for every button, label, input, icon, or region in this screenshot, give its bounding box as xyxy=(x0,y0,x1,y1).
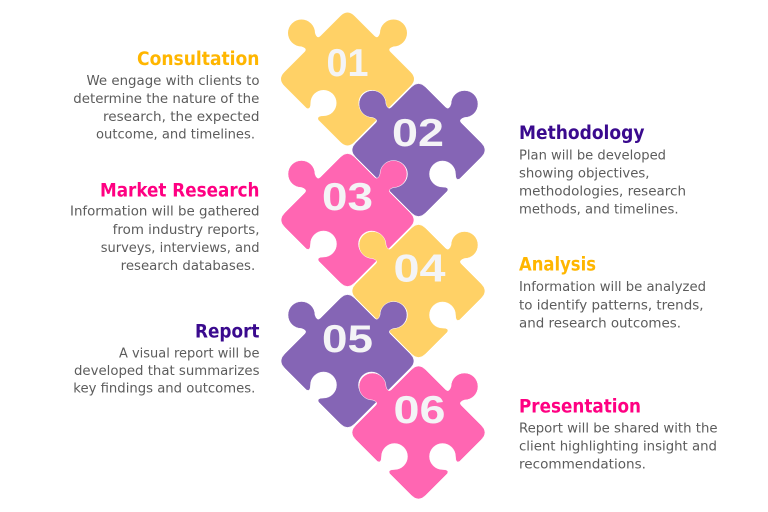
body: Presentation: client highlighting insight and xyxy=(519,440,717,454)
body: Presentation: Report will be shared with the xyxy=(519,421,718,436)
text block: Consultation xyxy=(73,49,260,142)
body: Methodology: methodologies, research xyxy=(519,184,686,199)
puzzle piece 04: 04 xyxy=(394,248,446,290)
heading: Report: Report xyxy=(195,322,260,343)
body: Report: A visual report will be xyxy=(119,346,260,361)
body: Methodology: showing objectives, xyxy=(519,166,650,181)
body: Analysis xyxy=(519,280,706,331)
body: Market Research: surveys, interviews, and xyxy=(101,241,260,256)
body: Methodology: Plan will be developed xyxy=(519,148,666,163)
puzzle piece 04 xyxy=(352,224,485,358)
text block: Analysis xyxy=(519,255,706,331)
puzzle piece 01 xyxy=(281,12,414,146)
text block: Report xyxy=(73,322,260,397)
body: Market Research: from industry reports, xyxy=(113,223,260,238)
body: Market Research: Information will be gathered xyxy=(70,205,260,220)
heading: Methodology: Methodology xyxy=(519,123,644,144)
body: Consultation: outcome, and timelines. xyxy=(96,128,255,142)
body: Consultation: We engage with clients to xyxy=(86,74,260,89)
body: Analysis: to identify patterns, trends, xyxy=(519,298,704,313)
body: Presentation: recommendations. xyxy=(519,457,646,472)
text block: Market Research xyxy=(70,181,260,274)
puzzle piece 06: 06 xyxy=(394,389,446,432)
heading: Market Research: Market Research xyxy=(100,181,260,202)
body: Report: key findings and outcomes. xyxy=(73,382,255,397)
puzzle piece 03: 03 xyxy=(322,176,373,219)
puzzle piece 01: 01 xyxy=(326,42,368,85)
text block: Methodology xyxy=(519,123,686,217)
body: Consultation: determine the nature of the xyxy=(73,92,259,107)
body: Report xyxy=(73,346,260,397)
body: Market Research: research databases. xyxy=(121,259,255,274)
puzzle piece 05 xyxy=(281,294,414,428)
body: Methodology: methods, and timelines. xyxy=(519,202,678,217)
body: Presentation xyxy=(519,421,718,472)
text block: Presentation xyxy=(519,397,718,472)
body: Report: developed that summarizes xyxy=(74,364,260,379)
heading: Presentation: Presentation xyxy=(519,397,641,418)
body: Consultation xyxy=(73,74,260,142)
heading: Consultation: Consultation xyxy=(137,49,260,70)
heading: Analysis: Analysis xyxy=(519,255,596,276)
body: Market Research xyxy=(70,205,260,274)
puzzle piece 02: 02 xyxy=(392,112,444,155)
body: Analysis: Information will be analyzed xyxy=(519,280,706,295)
puzzle piece 06 xyxy=(352,366,485,499)
body: Consultation: research, the expected xyxy=(103,110,260,125)
body: Analysis: and research outcomes. xyxy=(519,316,681,331)
puzzle piece 02 xyxy=(352,84,485,216)
puzzle piece 05: 05 xyxy=(322,318,373,361)
puzzle piece 03 xyxy=(281,154,414,286)
body: Methodology xyxy=(519,148,686,217)
